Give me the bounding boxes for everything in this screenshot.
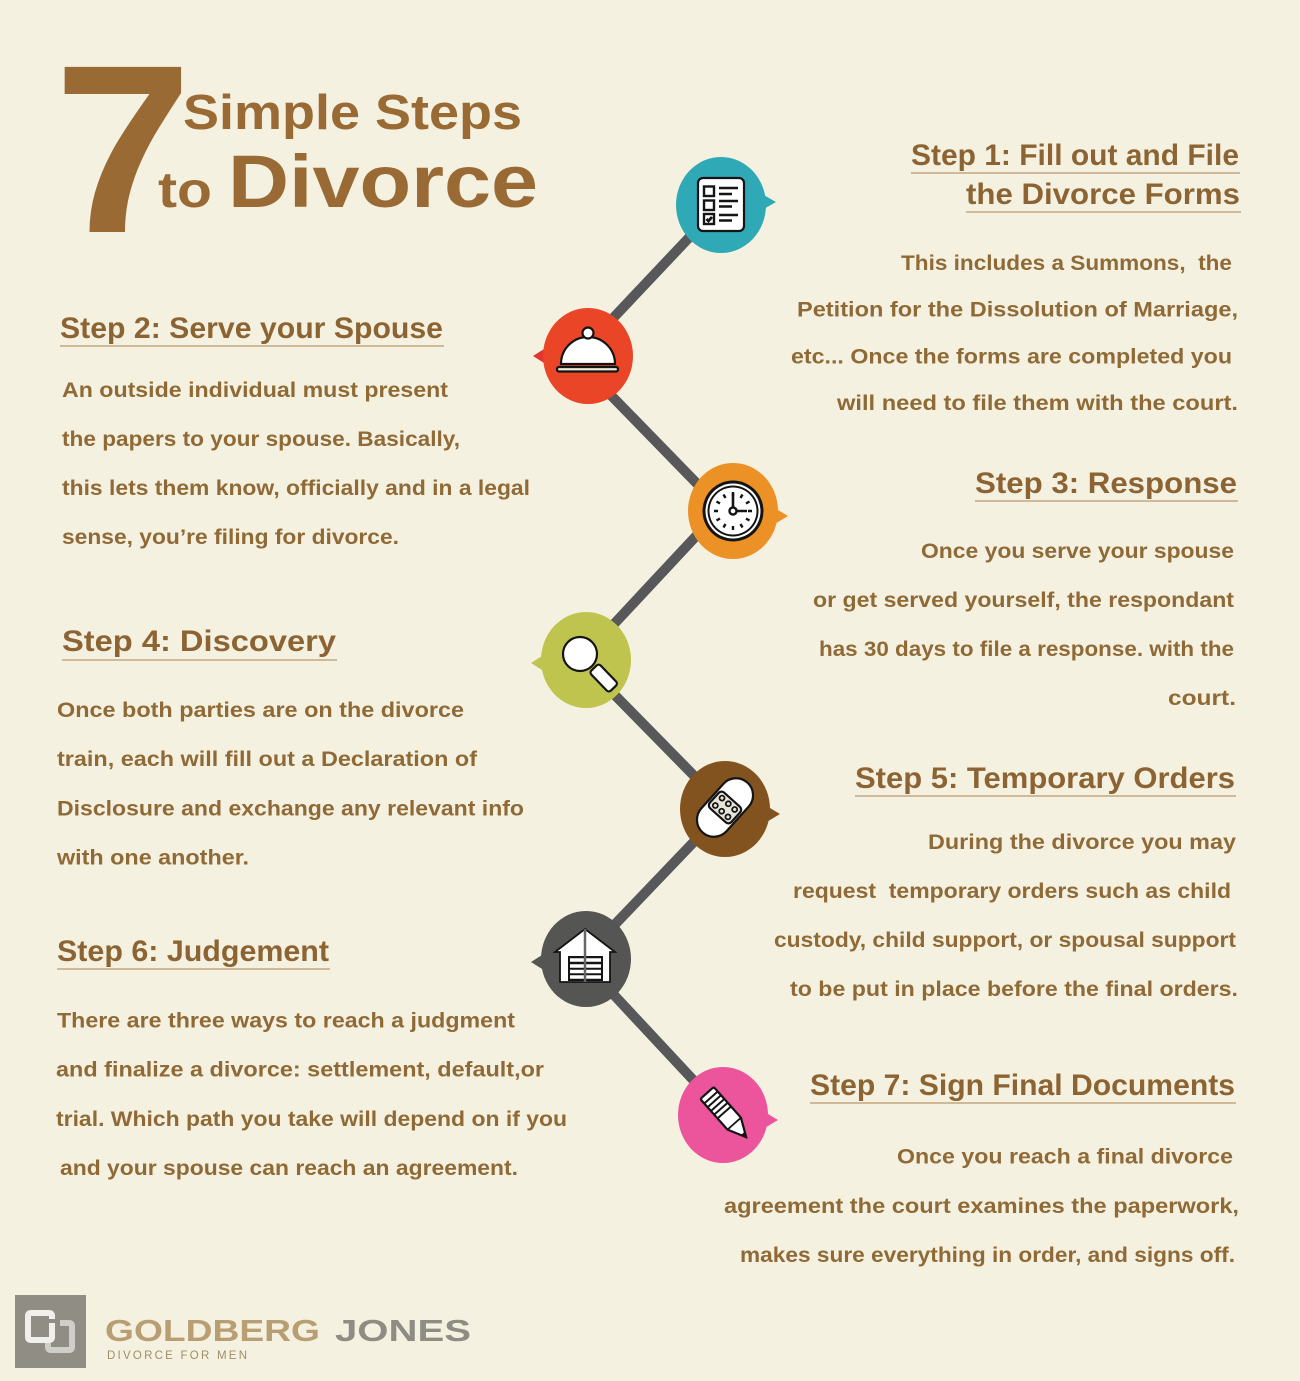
step 6 marker: [531, 911, 631, 1007]
panel: step 5: [774, 762, 1238, 1001]
wordmark: [105, 1313, 471, 1362]
text: step 5 body: to be put in place before the final orders.: [790, 977, 1238, 1001]
title: [54, 15, 538, 283]
text: step 1 body: Petition for the Dissolution of Marriage,: [797, 298, 1238, 322]
panel: step 4: [56, 625, 524, 870]
text: step 1 body: etc... Once the forms are completed you: [791, 344, 1232, 368]
text: step 2 body: this lets them know, officially and in a legal: [62, 476, 530, 500]
step 2 marker: [533, 308, 633, 404]
step 5 marker: [680, 761, 780, 857]
text: step 7 body: Once you reach a final divorce: [897, 1144, 1233, 1168]
text: step 1 body: This includes a Summons, the: [901, 251, 1232, 275]
heading: step 3: Step 3: Response: [975, 467, 1237, 500]
title: 7: [54, 15, 192, 283]
step 3 marker: [688, 463, 788, 559]
text: step 6 body: and your spouse can reach an agreement.: [60, 1156, 518, 1180]
text: step 5 body: [774, 830, 1238, 1001]
heading: step 4: Step 4: Discovery: [62, 625, 336, 658]
icon: serving cloche: [557, 328, 618, 372]
text: step 1 body: will need to file them with the court.: [836, 391, 1238, 415]
heading: step 6: Step 6: Judgement: [57, 935, 329, 968]
icon: checklist form: [698, 178, 744, 231]
text: step 6 body: There are three ways to reach a judgment: [57, 1008, 515, 1032]
text: step 3 body: [813, 539, 1236, 710]
text: step 5 body: During the divorce you may: [928, 830, 1236, 854]
heading: step 2: Step 2: Serve your Spouse: [60, 312, 443, 345]
title: to: [158, 162, 212, 218]
text: step 7 body: [724, 1144, 1239, 1267]
text: step 5 body: custody, child support, or spousal support: [774, 928, 1236, 952]
logo: Goldberg Jones: [15, 1295, 471, 1368]
text: step 4 body: Once both parties are on the divorce: [57, 698, 464, 722]
text: step 7 body: agreement the court examines the paperwork,: [724, 1194, 1239, 1218]
title: Divorce: [228, 140, 538, 223]
text: step 7 body: makes sure everything in order, and signs off.: [740, 1243, 1235, 1267]
heading: step 1: [911, 139, 1241, 212]
text: step 2 body: An outside individual must present: [62, 378, 448, 402]
step 7 marker: [678, 1067, 778, 1163]
text: step 4 body: Disclosure and exchange any relevant info: [57, 796, 524, 820]
icon: magnifying glass: [563, 637, 618, 693]
timeline connector: [600, 226, 712, 1098]
text: step 3 body: court.: [1168, 686, 1236, 710]
text: step 6 body: and finalize a divorce: settlement, default,or: [56, 1058, 545, 1082]
wordmark: JONES: [335, 1313, 471, 1348]
panel: step 6: [56, 935, 567, 1180]
icon: chain links: [15, 1295, 86, 1368]
wordmark: DIVORCE FOR MEN: [107, 1350, 247, 1362]
text: step 4 body: [56, 698, 524, 870]
panel: step 1: [791, 139, 1241, 415]
icon: clock: [702, 480, 764, 542]
icon: pencil: [700, 1087, 753, 1143]
heading: step 5: Step 5: Temporary Orders: [855, 762, 1235, 795]
text: step 6 body: trial. Which path you take will depend on if you: [56, 1107, 567, 1131]
text: step 3 body: has 30 days to file a response. with the: [819, 637, 1234, 661]
panel: step 2: [60, 312, 530, 549]
heading: step 1: Step 1: Fill out and File: [911, 139, 1239, 172]
panel: step 3: [813, 467, 1238, 710]
step 1 marker: [676, 157, 776, 253]
wordmark: GOLDBERG: [105, 1313, 320, 1348]
text: step 4 body: train, each will fill out a Declaration of: [57, 747, 478, 771]
heading: step 1: the Divorce Forms: [966, 178, 1240, 211]
text: step 3 body: Once you serve your spouse: [921, 539, 1234, 563]
text: step 5 body: request temporary orders such as child: [793, 879, 1231, 903]
text: step 4 body: with one another.: [56, 846, 249, 870]
panel: step 7: [724, 1069, 1239, 1267]
text: step 2 body: [62, 378, 530, 549]
icon: house with garage: [555, 929, 615, 982]
text: step 6 body: [56, 1008, 567, 1180]
icon: bandage: [690, 771, 760, 844]
title: Simple Steps: [183, 86, 522, 140]
heading: step 7: Step 7: Sign Final Documents: [810, 1069, 1235, 1102]
text: step 3 body: or get served yourself, the respondant: [813, 588, 1234, 612]
text: step 1 body: [791, 251, 1238, 415]
text: step 2 body: the papers to your spouse. Basically,: [62, 427, 460, 451]
text: step 2 body: sense, you’re filing for divorce.: [62, 525, 399, 549]
step 4 marker: [531, 612, 631, 708]
